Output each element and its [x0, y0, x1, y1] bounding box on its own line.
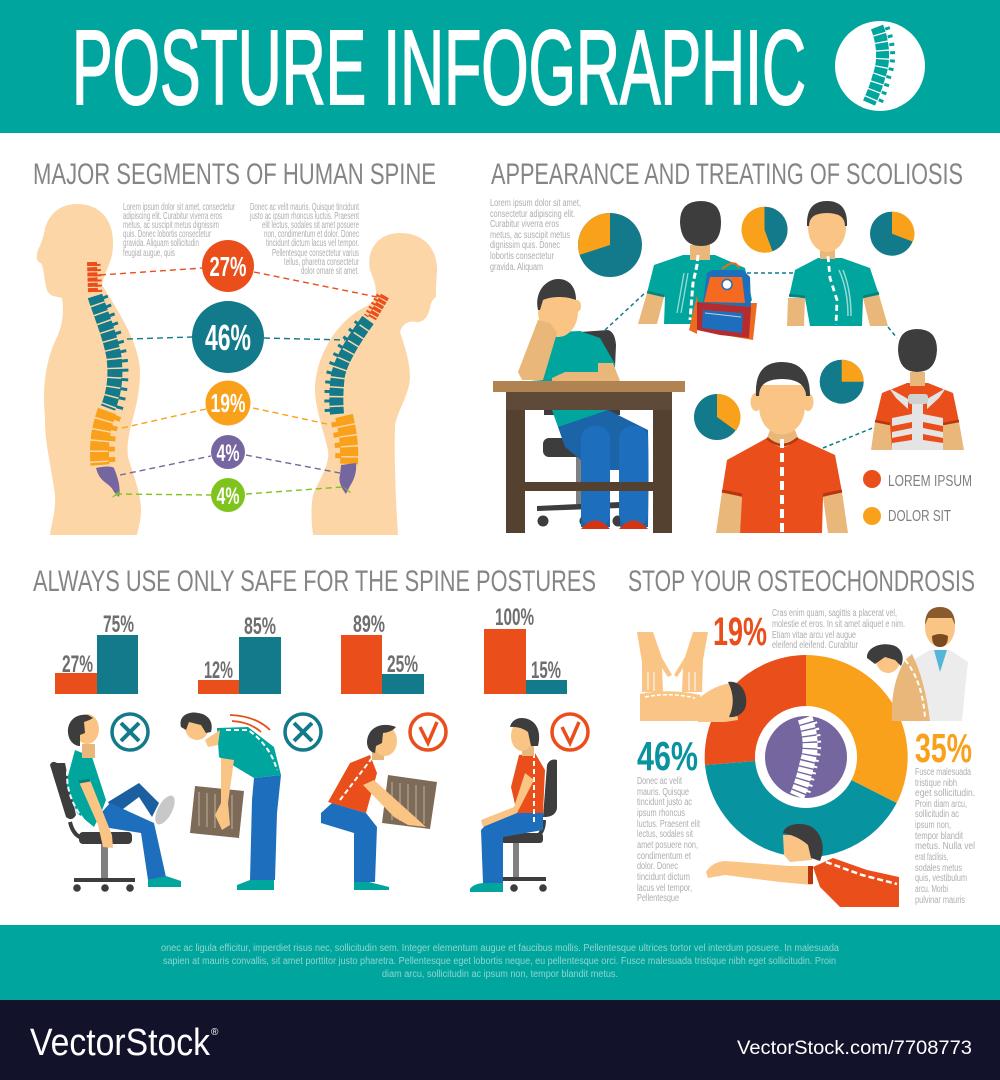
heading: safe postures: ALWAYS USE ONLY SAFE FOR THE SPINE POSTURES: [33, 565, 596, 598]
legend: [863, 470, 972, 525]
chair: [544, 330, 620, 415]
panel: human spine segments: [37, 202, 437, 535]
text block 35%: quis, vestibulum: [915, 873, 967, 884]
figure: lying man: [706, 824, 899, 907]
pie charts: [578, 207, 915, 440]
text block: [490, 198, 581, 273]
callout 35%: 35%: [915, 725, 972, 771]
text block 35%: tempor blandit: [915, 831, 963, 842]
panel: osteochondrosis: [637, 607, 975, 907]
text block 46%: tincidunt dictum: [637, 872, 690, 883]
shoes: [581, 520, 648, 529]
bar chart 3: 25%: [387, 651, 418, 678]
text block: dignissim quis. Donec: [490, 240, 560, 251]
figure: safe lift: [321, 725, 437, 890]
text block: right: elit lectus, sodales sit amet posuere: [262, 220, 359, 231]
left spine: [92, 262, 125, 465]
text block: right: Pellentesque consectetur varius: [272, 248, 359, 259]
text block: lobortis consectetur: [490, 251, 554, 262]
callout 46%: 46%: [205, 317, 251, 358]
footer text: onec ac ligula efficitur, imperdiet risus nec, sollicitudin sem. Integer elementum augue et faucibus mollis. Pellentesque ultrices tortor vel interdum posuere. In malesuada: [161, 943, 839, 954]
arm to cheek: [518, 320, 557, 380]
bar chart 2: 85%: [244, 613, 276, 640]
callout 19%: 19%: [210, 388, 246, 418]
connector lines: [100, 268, 382, 495]
footer text: sapien at mauris convallis, sit amet porttitor justo pharetra. Pellentesque eget lobortis neque, eu pellentesque orci. Fusce malesuada tristique nibh eget sollicitudin. Proin: [163, 956, 836, 967]
donut chart: [705, 655, 908, 857]
text block 35%: eget sollicitudin.: [915, 788, 975, 799]
text block 46%: lacus vel tempor,: [637, 883, 692, 894]
text block: right: tincidunt dictum lacus vel tempor.: [266, 238, 359, 249]
legend: DOLOR SIT: [888, 508, 951, 525]
text block 46%: Pellentesque: [637, 893, 679, 904]
left coccyx: [111, 491, 119, 498]
text block 35%: arcu. Morbi: [915, 884, 948, 895]
text block 19%: [772, 608, 905, 651]
text block 46%: lectus, sodales sit: [637, 829, 693, 840]
panel: scoliosis: [490, 198, 972, 533]
desk: [493, 381, 685, 533]
text block 19%: Etiam vitae arcu vel augue: [772, 630, 856, 641]
bar chart 2: [198, 613, 281, 694]
icon: check 2: [552, 714, 588, 750]
figure: leaning back in chair: [50, 714, 181, 892]
text block 35%: erat facilisis,: [915, 852, 948, 863]
callout 27%: [202, 240, 254, 292]
figure: back with backpack: [638, 201, 752, 324]
text block 46%: tincidunt justo ac: [637, 797, 692, 808]
text block 19%: eleifend eleifend. Curabitur: [772, 640, 858, 651]
callout 4% purple: 4%: [216, 440, 240, 467]
bar chart 1: 27%: [62, 651, 93, 678]
text block 46%: mauris. Quisque: [637, 787, 689, 798]
text block 35%: Fusce malesuada: [915, 767, 971, 778]
text block: right: dolor ornare sit amet.: [301, 266, 359, 277]
callout 4% green: 4%: [216, 483, 240, 510]
text block: Curabitur viverra eros: [490, 219, 559, 230]
text block: right: non, condimentum et dolor. Donec: [264, 229, 359, 240]
text block: consectetur adipiscing elit.: [490, 209, 575, 220]
text block 35%: tristique nibh: [915, 778, 957, 789]
right spine: [327, 295, 385, 464]
text block 46%: amet posuere non,: [637, 840, 698, 851]
right coccyx: [342, 486, 351, 493]
text block: right: justo ac ipsum rhoncus luctus. Praesent: [249, 211, 359, 222]
icon: spine in circle: [835, 21, 925, 111]
bar chart 3: 89%: [353, 611, 385, 638]
text block 35%: sollicitudin ac: [915, 809, 959, 820]
bar chart 4: 15%: [531, 657, 561, 684]
bar chart 1: [55, 611, 138, 694]
header banner: [0, 0, 1000, 133]
image URL text: VectorStock.com/7708773: [737, 1038, 972, 1059]
text block: right: Donec ac velit mauris. Quisque tincidunt: [250, 202, 359, 213]
text block: left: metus, ac suscipit metus dignissim: [123, 220, 219, 231]
text block 46%: [637, 776, 700, 904]
icon: cross 2: [285, 714, 321, 750]
text block 35%: metus. Nulla vel: [915, 841, 975, 852]
text block 35%: pulvinar mauris: [915, 895, 965, 906]
text block 46%: dolor. Donec: [637, 861, 678, 872]
legend: LOREM IPSUM: [888, 473, 972, 490]
heading: major segments: MAJOR SEGMENTS OF HUMAN SPINE: [33, 158, 436, 191]
bar chart 1: 75%: [103, 611, 134, 638]
text block 19%: Cras enim quam, sagittis a placerat vel,: [772, 608, 897, 619]
panel: postures: [50, 604, 588, 892]
figure: front teal: [787, 201, 888, 326]
callout 4% green: [211, 478, 245, 512]
text block 35%: Proin diam arcu,: [915, 799, 967, 810]
registered mark: ®: [211, 1027, 219, 1038]
text block 35%: sodales metus: [915, 863, 962, 874]
text block: right: tellus, pharetra consectetur: [284, 257, 359, 268]
trousers: [558, 410, 648, 527]
text block: left: adipiscing elit. Curabitur viverra eros: [123, 211, 222, 222]
footer band: [0, 925, 1000, 1000]
figure: correct sitting: [470, 718, 557, 892]
figure: back brace: [871, 329, 964, 450]
text block: left: Lorem ipsum dolor sit amet, consectetur: [123, 202, 235, 213]
icon: check 1: [410, 714, 446, 750]
text block: metus, ac suscipit metus: [490, 230, 570, 241]
text block 46%: ipsum rhoncus: [637, 808, 685, 819]
footer text: diam arcu, sollicitudin ac ipsum non, tempor blandit metus.: [382, 969, 618, 980]
callout 19%: 19%: [713, 610, 767, 654]
figure: bending with box: [181, 713, 281, 890]
left sacrum: [96, 466, 120, 497]
text block: left: quis. Donec lobortis consectetur: [123, 229, 211, 240]
text block 35%: [915, 767, 975, 906]
text block 46%: condimentum et: [637, 851, 691, 862]
connector lines: [605, 273, 897, 448]
figure: doctor: [867, 607, 968, 721]
right body silhouette: [312, 233, 437, 535]
text block 46%: Donec ac velit: [637, 776, 682, 787]
text block: left: gravida. Aliquam sollicitudin: [123, 238, 199, 249]
figure: front orange: [716, 362, 848, 533]
left body silhouette: [37, 204, 141, 535]
text block: right: [249, 202, 359, 277]
callout 19%: [206, 380, 250, 426]
text block: gravida. Aliquam: [490, 262, 543, 273]
footer text: [161, 943, 839, 980]
callout 27%: 27%: [210, 251, 247, 282]
bar chart 4: 100%: [495, 604, 534, 631]
torso: [522, 331, 615, 381]
watermark bar: [0, 1000, 1000, 1080]
icon: cross 1: [112, 714, 148, 750]
callout 4% purple: [211, 435, 245, 469]
VectorStock logo text: VectorStock: [30, 1022, 211, 1064]
text block 35%: ipsum non,: [915, 820, 951, 831]
text block: Lorem ipsum dolor sit amet,: [490, 198, 581, 209]
text block: left: [123, 202, 235, 259]
figure: massage: [637, 632, 746, 722]
right sacrum: [339, 463, 356, 494]
head: [573, 300, 581, 312]
text block: left: feugiat augue, quis: [123, 248, 175, 259]
forearm: [552, 363, 620, 381]
seated man at desk: [518, 279, 648, 529]
bar chart 3: [341, 611, 424, 694]
text block 46%: luctus. Praesent elit: [637, 819, 700, 830]
bar chart 2: 12%: [204, 657, 233, 684]
callout 46%: [192, 301, 264, 373]
callout 46%: 46%: [637, 733, 698, 779]
bar chart 4: [484, 604, 567, 694]
icon: backpack: [689, 263, 757, 340]
text block 19%: molestie et eros. In sit amet aliquet e nim.: [772, 619, 905, 630]
